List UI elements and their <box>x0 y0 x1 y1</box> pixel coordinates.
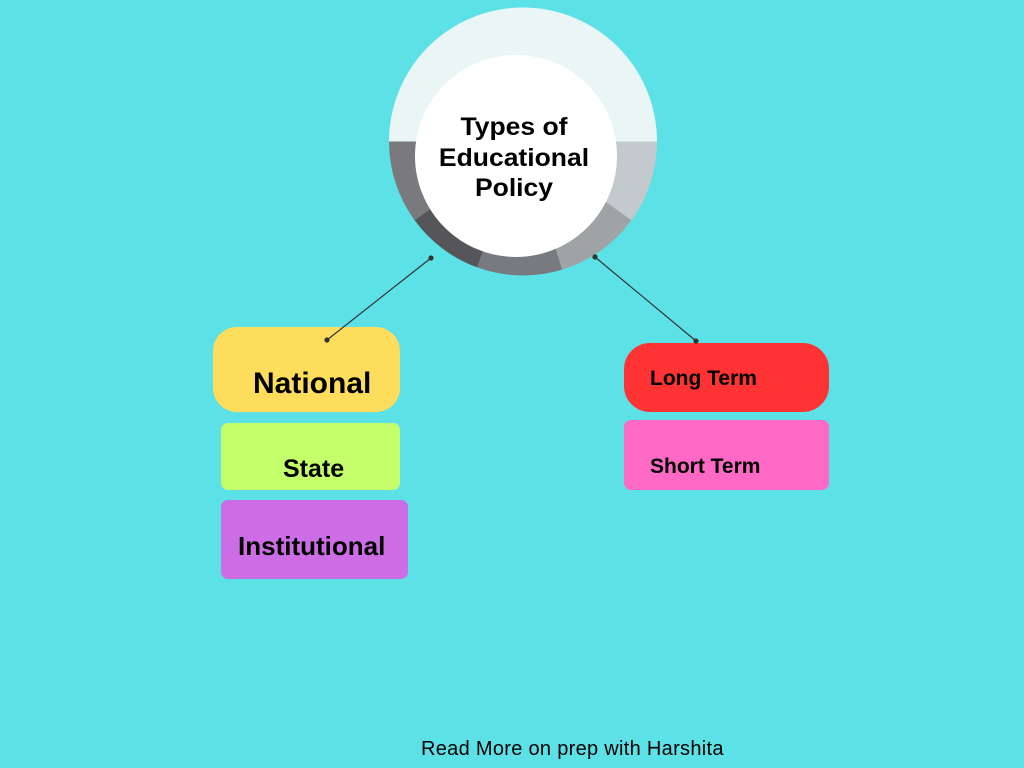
title: Policy <box>475 174 553 202</box>
footer: Read More on prep with Harshita <box>421 738 724 760</box>
box: Long Term: Long Term <box>650 367 757 390</box>
box: State: State <box>283 455 344 483</box>
box: Institutional: Institutional <box>238 531 385 561</box>
box: Short Term <box>624 420 829 490</box>
box: National <box>213 327 400 412</box>
connector: left <box>325 256 433 342</box>
box: National: National <box>253 367 371 400</box>
title <box>439 113 589 202</box>
box: Short Term: Short Term <box>650 455 760 478</box>
title: Types of <box>460 113 567 141</box>
box: Long Term <box>624 343 829 412</box>
connector: right <box>593 255 698 343</box>
box: Institutional <box>221 500 408 579</box>
title: Educational <box>439 144 589 172</box>
box: State <box>221 423 400 490</box>
